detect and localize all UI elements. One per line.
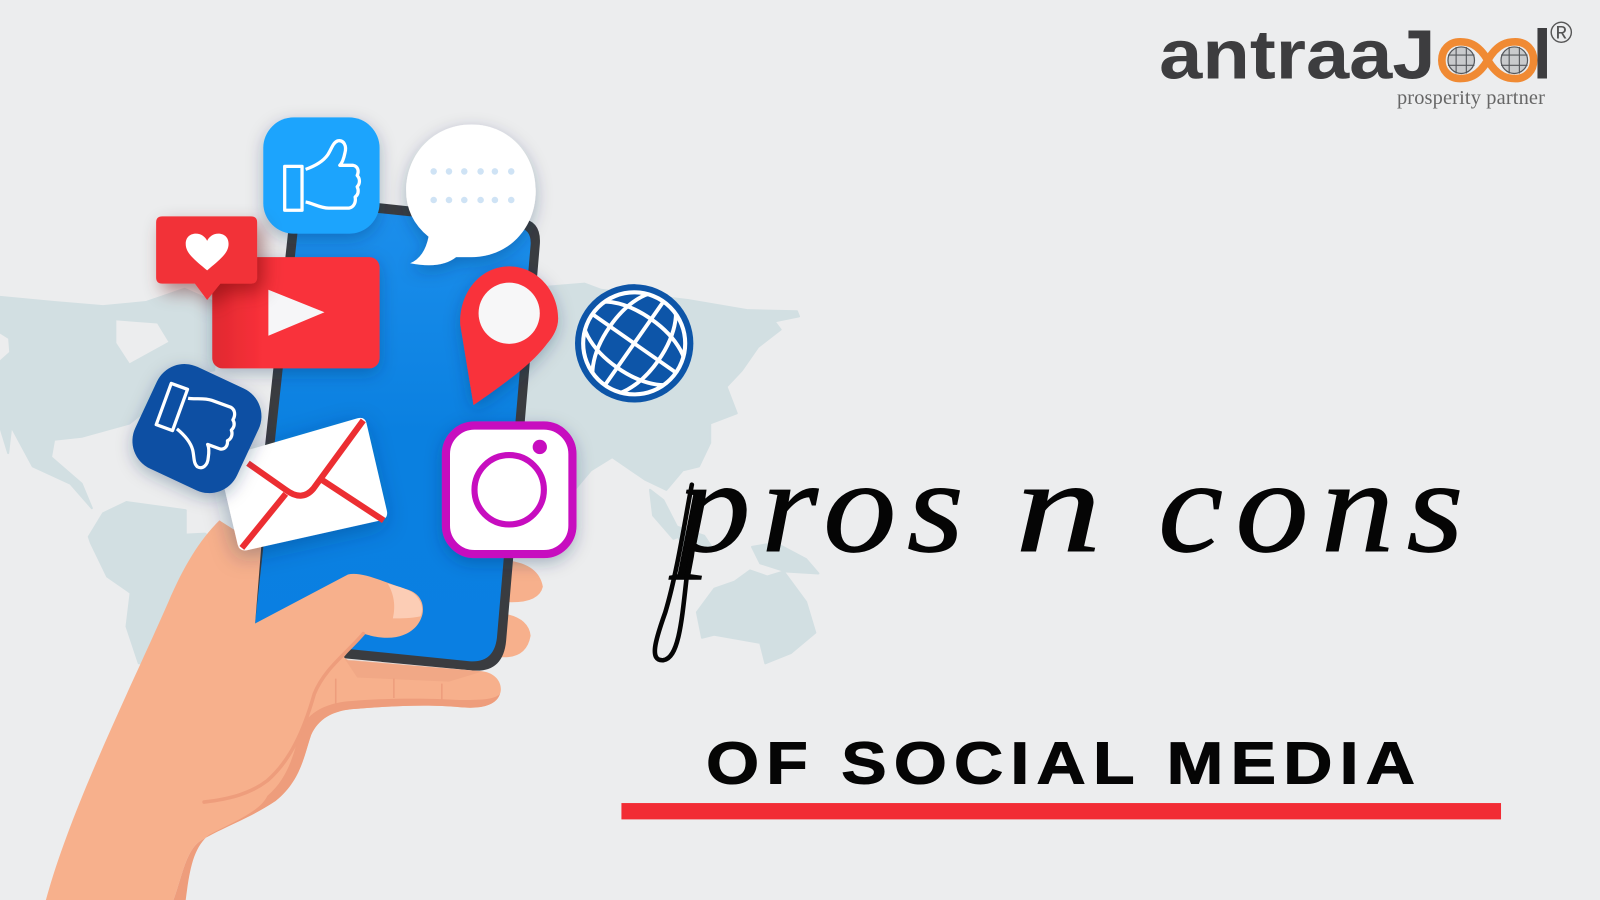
- icon: youtube play: [212, 257, 380, 368]
- title: pros n cons: cons: [1158, 434, 1463, 581]
- phone body: [246, 196, 540, 671]
- logo letter l: l: [1533, 16, 1552, 94]
- icon: envelope: [222, 418, 387, 550]
- world map: [0, 284, 818, 665]
- logo wordmark: antraaJ: [1159, 15, 1436, 94]
- icon: globe: [575, 284, 694, 402]
- subtitle: of social media: OF SOCIAL MEDIA: [706, 730, 1415, 797]
- phone screen: [255, 206, 531, 661]
- red underline: [621, 803, 1501, 819]
- hand: palm and thumb: [46, 520, 501, 900]
- icon: instagram: [446, 426, 572, 554]
- icon: like heart notification: [156, 216, 257, 300]
- logo infinity mark with globes: [1442, 42, 1534, 79]
- hand: finger creases: [336, 679, 442, 707]
- icon: location pin: [460, 266, 558, 405]
- hand: back fingers: [500, 560, 543, 657]
- logo: antraajaal: [1159, 15, 1573, 109]
- title: pros n cons: pros: [668, 434, 964, 581]
- title: pros n cons: n: [1015, 434, 1102, 580]
- title: pros n cons: [655, 434, 1463, 660]
- hand: outer edge shading: [173, 694, 500, 900]
- hand: shadow under phone: [345, 659, 483, 682]
- registered mark: ®: [1550, 16, 1573, 50]
- hand and phone illustration: [46, 196, 543, 900]
- icon: speech bubble: [406, 124, 536, 265]
- icon: thumbs down: [122, 354, 272, 503]
- logo tagline: prosperity partner: [1397, 87, 1545, 109]
- icon: thumbs up: [263, 117, 380, 234]
- hand: thumb nail: [388, 584, 422, 618]
- hand: palm crease: [204, 634, 363, 802]
